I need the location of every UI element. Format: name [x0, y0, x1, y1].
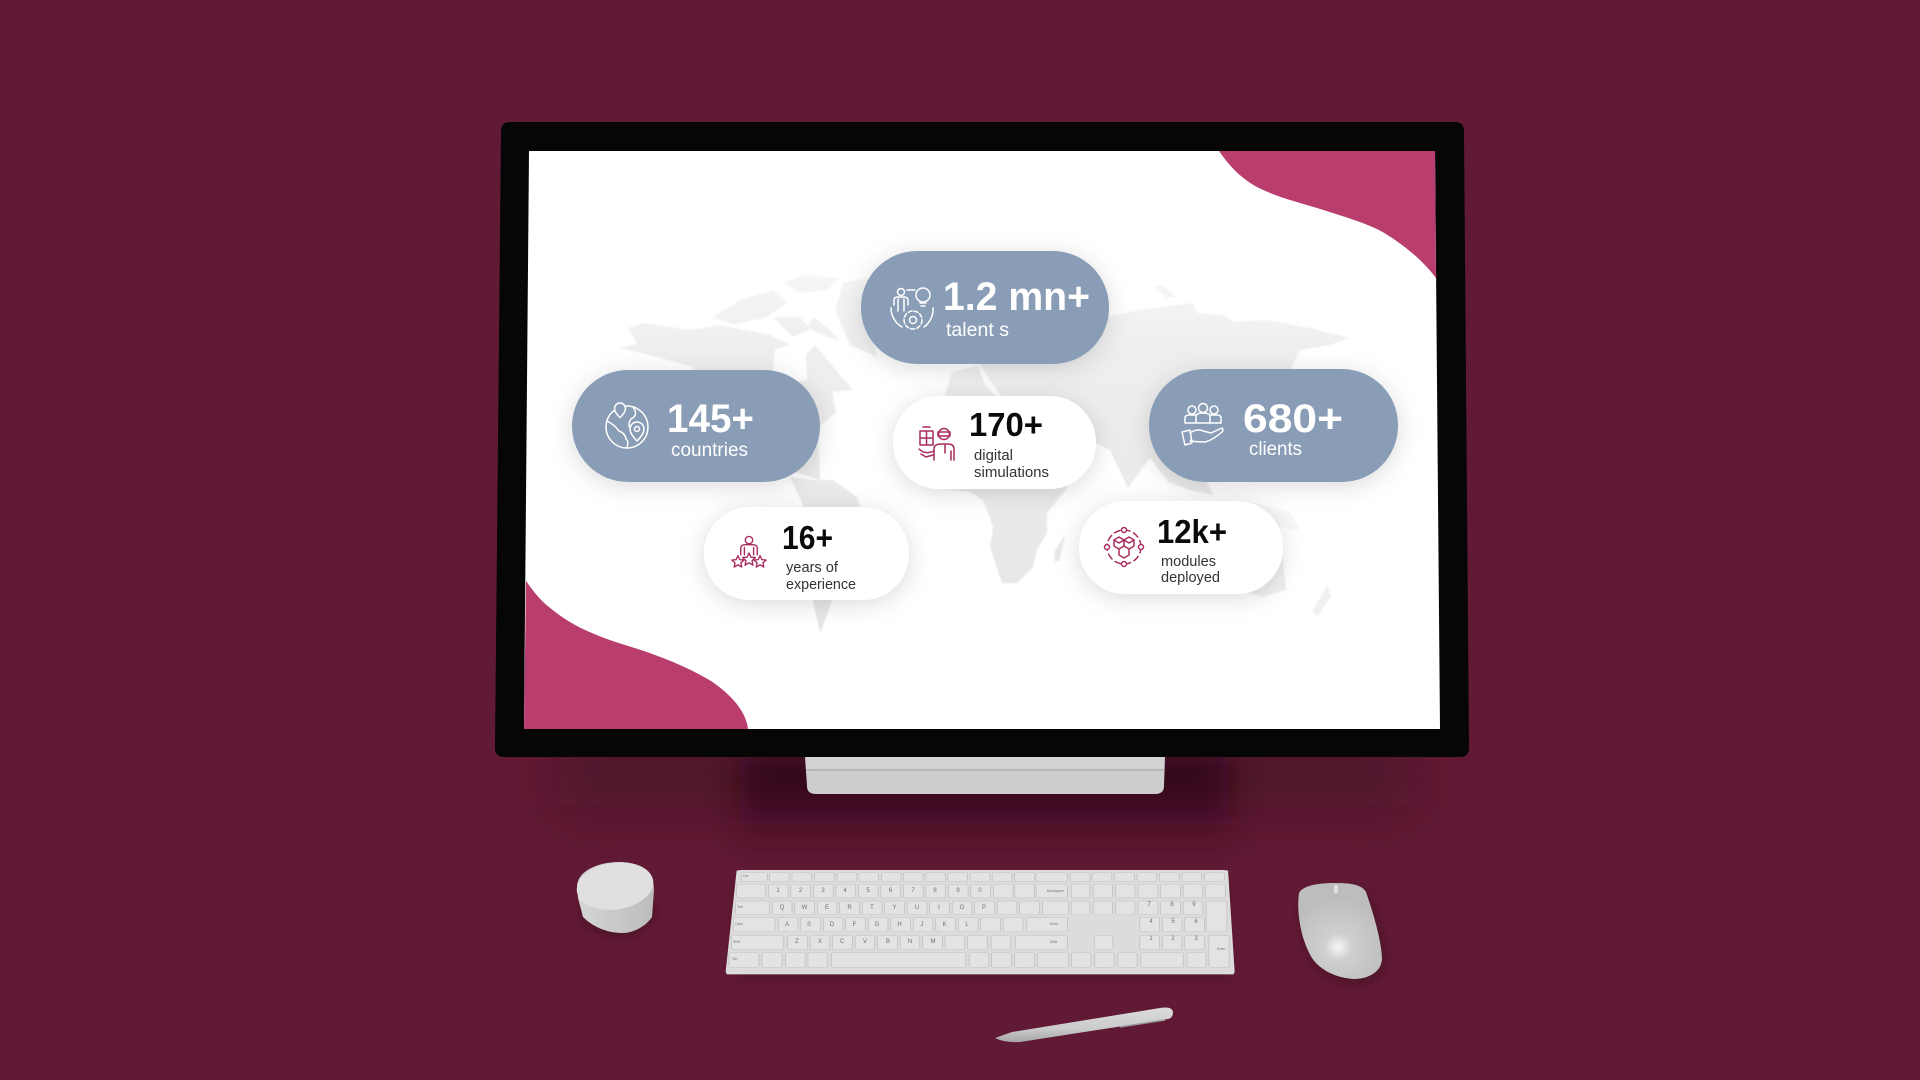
- corner wave top right: [1219, 151, 1436, 278]
- key legends: 123: [1149, 936, 1198, 942]
- icon: people on a hand: [1182, 404, 1223, 445]
- pill: [893, 396, 1096, 489]
- key legends: 1234567890: [776, 888, 982, 894]
- monitor stand: [805, 757, 1165, 794]
- icon: globe with pins: [606, 403, 648, 448]
- value: 1.2 mn+: [943, 275, 1090, 319]
- new zealand: [1312, 585, 1331, 616]
- key legends: ZXCVBNM: [795, 939, 936, 945]
- value: 16+: [782, 519, 833, 556]
- label: talent s: [946, 320, 1009, 341]
- australia: [1195, 530, 1286, 597]
- key legends: QWERTYUIOP: [780, 905, 986, 911]
- icon: person with headset and device: [919, 427, 954, 460]
- key legends: 456: [1149, 919, 1198, 925]
- key legends: [732, 874, 1226, 961]
- icon: person with three stars: [732, 536, 766, 567]
- label line 2: experience: [786, 576, 856, 593]
- mouse: [1298, 883, 1385, 983]
- icon: person, bulb and gear: [891, 288, 933, 329]
- value: 680+: [1243, 397, 1343, 441]
- key legends: Shift: [733, 940, 740, 944]
- pill: [861, 251, 1109, 364]
- key legends: Caps: [735, 922, 743, 926]
- greenland: [835, 278, 877, 357]
- stat: modules deployed: [1079, 501, 1283, 594]
- screen: [524, 151, 1440, 729]
- key legends: Backspace: [1047, 889, 1064, 893]
- south america: [790, 477, 860, 633]
- stat: countries: [572, 370, 820, 482]
- monitor bezel: [495, 122, 1469, 757]
- pill: [704, 507, 909, 600]
- pill: [572, 370, 820, 482]
- eurasia: [980, 303, 1350, 495]
- north america: [620, 323, 853, 480]
- corner wave bottom left: [524, 581, 748, 729]
- key legends: Esc: [743, 874, 749, 878]
- label: digital: [974, 447, 1013, 464]
- keyboard: [726, 870, 1235, 980]
- pill: [1079, 501, 1283, 594]
- pill: [1149, 369, 1398, 482]
- stat: clients: [1149, 369, 1398, 482]
- indonesia: [1240, 500, 1300, 530]
- svalbard: [1153, 285, 1176, 298]
- key legends: Enter: [1217, 947, 1226, 951]
- key legends: Tab: [737, 905, 743, 909]
- stat: talents: [861, 251, 1109, 364]
- label: modules: [1161, 553, 1216, 570]
- label: countries: [671, 440, 748, 461]
- label line 2: deployed: [1161, 569, 1220, 586]
- madagascar: [1054, 535, 1065, 562]
- key legends: Ctrl: [732, 957, 738, 961]
- value: 170+: [969, 406, 1043, 443]
- stat: years of experience: [704, 507, 909, 600]
- arctic island: ellesmere: [783, 275, 840, 293]
- key legends: Enter: [1050, 922, 1059, 926]
- key legends: Shift: [1050, 940, 1057, 944]
- stat: digital simulations: [893, 396, 1096, 489]
- key legends: ASDFGHJKL: [785, 922, 969, 928]
- monitor shadow: [560, 735, 1410, 852]
- key rows: [729, 873, 1229, 967]
- africa: [940, 480, 1067, 583]
- value: 145+: [667, 397, 754, 441]
- puck: [574, 857, 656, 936]
- world map: [620, 275, 1350, 633]
- icon: cubes in a dashed ring: [1104, 528, 1144, 566]
- label: years of: [786, 559, 839, 576]
- europe: [945, 366, 1000, 402]
- pen: [995, 1008, 1173, 1042]
- label: clients: [1249, 439, 1302, 460]
- arctic islands: west: [713, 290, 787, 325]
- arctic island: baffin: [807, 317, 840, 340]
- arctic islands: centre: [773, 317, 810, 337]
- key legends: 789: [1147, 902, 1196, 908]
- value: 12k+: [1157, 513, 1227, 550]
- label line 2: simulations: [974, 464, 1049, 481]
